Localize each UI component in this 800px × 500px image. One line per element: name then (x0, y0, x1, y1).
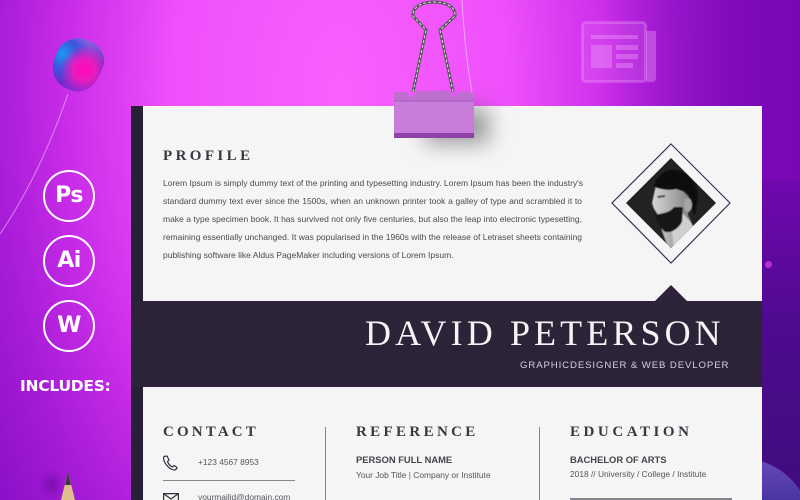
icon: Photoshop (43, 170, 95, 222)
job title: GRAPHICDESIGNER & WEB DEVLOPER (520, 360, 729, 371)
background right dark edge (600, 0, 800, 500)
icon: mail (163, 493, 179, 500)
clip shadow (425, 108, 489, 144)
icon: newspaper (581, 21, 656, 83)
profile text: remaining essentially unchanged. It was popularised in the 1960s with the release of Letraset sheets containing (163, 232, 582, 242)
paper side band (131, 106, 143, 500)
binder clip (394, 0, 474, 138)
profile text: make a type specimen book. It has survived not only five centuries, but also the leap into electronic typesetting, (163, 214, 582, 224)
decorative blob bottom right (762, 462, 800, 500)
reference heading: REFERENCE (356, 424, 479, 440)
icon: Word: W (57, 313, 81, 338)
profile text: Lorem Ipsum is simply dummy text of the printing and typesetting industry. Lorem Ipsum has been the industry's (163, 178, 583, 188)
icon: Photoshop: Ps (55, 183, 83, 208)
reference job: Your Job Title | Company or Institute (356, 470, 491, 480)
panel: resume paper (143, 106, 762, 500)
thin paper reflection line (462, 0, 472, 92)
portrait in diamond frame (611, 143, 731, 264)
name: DAVID PETERSON (365, 313, 725, 353)
column divider right (539, 427, 540, 500)
reference name: PERSON FULL NAME (356, 454, 452, 465)
education divider (570, 498, 732, 500)
column divider left (325, 427, 326, 500)
profile text (163, 178, 583, 260)
profile heading: PROFILE (163, 148, 253, 164)
education heading: EDUCATION (570, 424, 693, 440)
degree: BACHELOR OF ARTS (570, 454, 667, 465)
name band (131, 301, 762, 387)
phone number: +123 4567 8953 (198, 457, 259, 467)
contact heading: CONTACT (163, 424, 259, 440)
icon: Illustrator (43, 235, 95, 287)
institution: 2018 // University / College / Institute (570, 469, 706, 479)
decorative dot (765, 261, 772, 268)
includes label: INCLUDES: (20, 377, 111, 395)
thin balloon string (0, 94, 68, 234)
profile text: publishing software like Aldus PageMaker including versions of Lorem Ipsum. (163, 250, 454, 260)
icon: phone (163, 455, 178, 470)
icon: balloon (46, 31, 110, 98)
icon: Illustrator: Ai (57, 248, 81, 273)
icon: Word (43, 300, 95, 352)
contact divider (163, 480, 295, 481)
profile text: standard dummy text ever since the 1500s, when an unknown printer took a galley of type and scrambled it to (163, 196, 582, 206)
icon: pencil (42, 472, 75, 500)
background bottom right dark area (762, 180, 800, 500)
triangle marker above name band (655, 285, 687, 301)
